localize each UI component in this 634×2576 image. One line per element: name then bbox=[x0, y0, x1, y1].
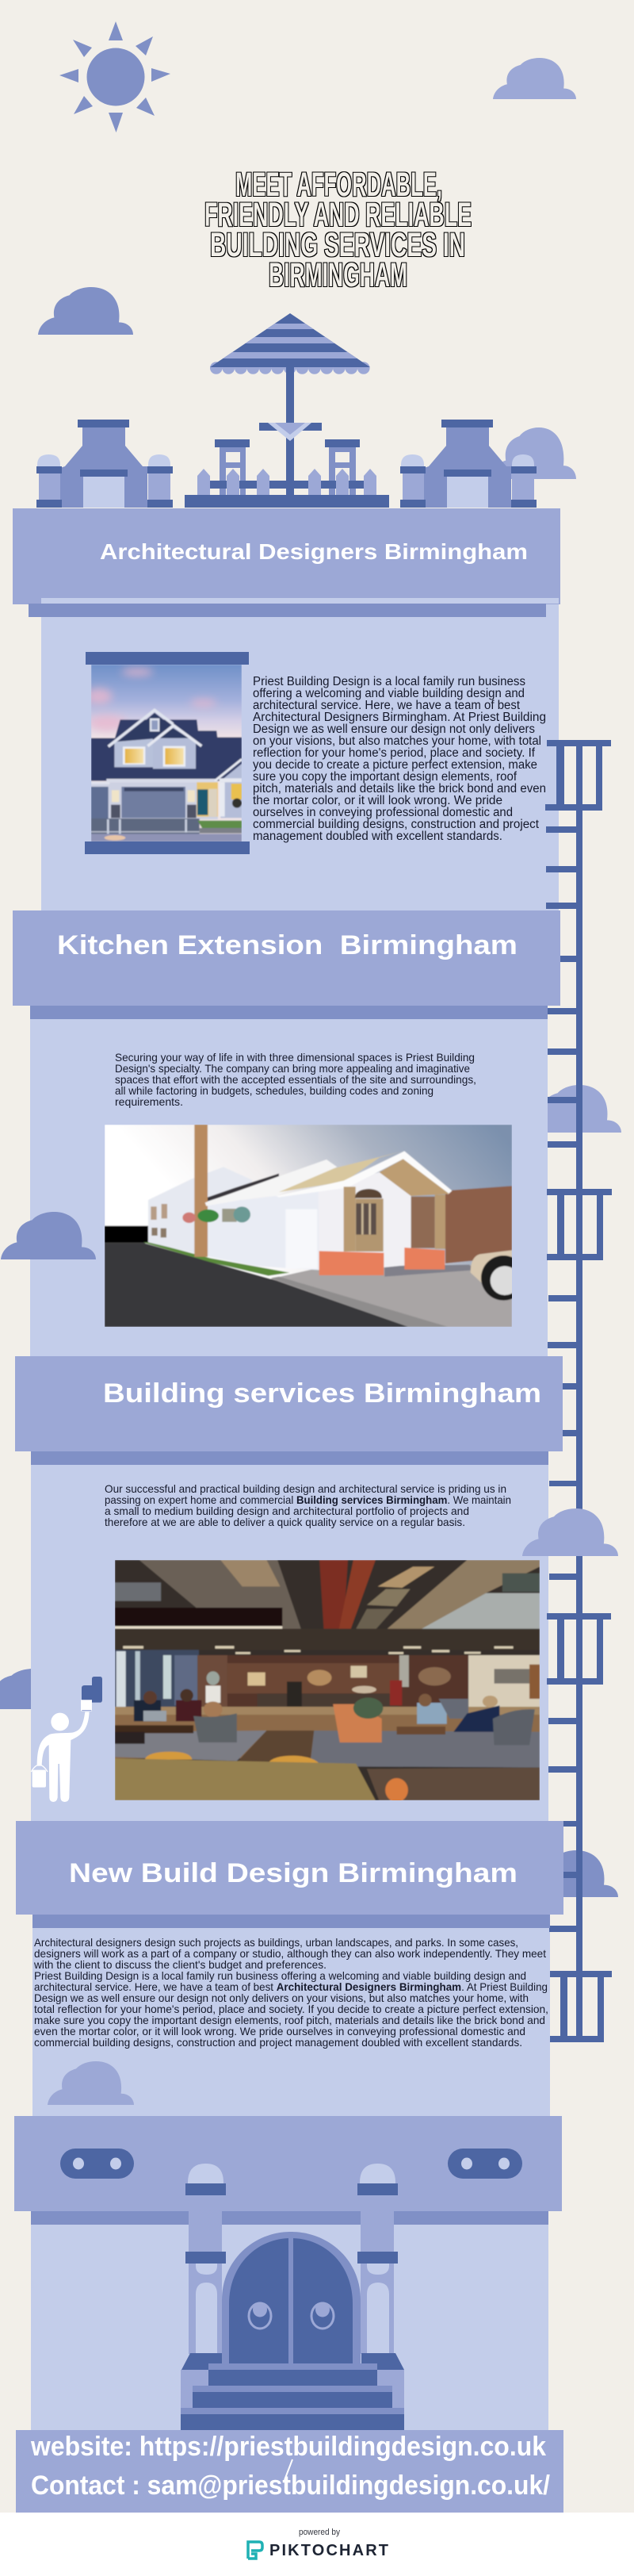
text: new build design description: Priest Building Design is a local family run business offering a welcoming and viable building design and bbox=[34, 1969, 526, 1982]
title bbox=[204, 166, 472, 294]
panel: section backgrounds bbox=[30, 598, 559, 2430]
panel: heading architectural designers bbox=[13, 508, 560, 617]
panel: heading kitchen extension: Kitchen Extension Birmingham bbox=[57, 930, 518, 960]
text: building services intro: passing on expert home and commercial Building services Birmingham. We maintain bbox=[105, 1493, 511, 1506]
icon: cloud left of extension render bbox=[1, 1212, 96, 1259]
text: architectural designers intro: reflection for your home's period, place and society. If bbox=[253, 746, 536, 760]
text: architectural designers intro: sure you copy the important design elements, roof bbox=[253, 770, 518, 784]
text: new build design description: Design we as well ensure our design not only delivers on your visions, but also matches your home, with bbox=[34, 1991, 529, 2004]
text: new build design description bbox=[33, 1936, 548, 2049]
text: building services intro: a small to medium building design and architectural portfolio of projects and bbox=[105, 1505, 469, 1517]
ladder bbox=[545, 740, 612, 2042]
text: new build design description: architectural service. Here, we have a team of best Architectural Designers Birmingham. At Priest Building bbox=[34, 1980, 548, 1993]
fence base bbox=[185, 495, 389, 508]
small right tower bbox=[325, 439, 360, 495]
text: kitchen extension intro: spaces that effort with the accepted essentials of the site and surroundings, bbox=[115, 1073, 476, 1086]
panel: heading new build design: New Build Design Birmingham bbox=[69, 1858, 518, 1888]
text: architectural designers intro: the mortar color, or it will look wrong. We pride bbox=[253, 794, 502, 807]
icon: cloud behind right house bbox=[491, 427, 576, 479]
icon: cloud over right edge bbox=[522, 1508, 618, 1556]
text: architectural designers intro: commercial building designs, construction and project bbox=[253, 818, 540, 831]
text: new build design description: commercial building designs, construction and project management doubled with excellent standards. bbox=[34, 2036, 522, 2049]
photo: office lounge interior bbox=[115, 1560, 540, 1802]
text: architectural designers intro: offering a welcoming and viable building design and bbox=[253, 687, 525, 700]
photo: extension render bbox=[105, 1125, 526, 1327]
panel: heading kitchen extension bbox=[13, 910, 560, 1019]
text: building services intro: therefore at we are able to deliver a quick quality service on a regular basis. bbox=[105, 1516, 465, 1528]
icon: entrance door and steps bbox=[181, 2164, 404, 2430]
panel: building facade top bbox=[14, 2116, 562, 2225]
text: new build design description: Architectural designers design such projects as buildings, urban landscapes, and parks. In some cases, bbox=[34, 1936, 518, 1949]
icon: cloud behind panel left bbox=[0, 1669, 75, 1709]
text: architectural designers intro: you decide to create a picture perfect extension, make bbox=[253, 758, 537, 772]
fence bbox=[197, 469, 376, 495]
text: architectural designers intro: architectural service. Here, we have a team of best bbox=[253, 699, 521, 712]
icon: cloud in new build panel bbox=[48, 2061, 134, 2105]
text: kitchen extension intro: requirements. bbox=[115, 1095, 183, 1108]
left house bbox=[36, 420, 173, 508]
text: architectural designers intro: Design we as well ensure our design not only delivers bbox=[253, 723, 535, 736]
text: architectural designers intro: Priest Building Design is a local family run business bbox=[253, 675, 525, 688]
panel: contact details: Contact : sam@priestbuildingdesign.co.uk/ bbox=[31, 2471, 551, 2501]
panel: contact details: website: https://priestbuildingdesign.co.uk bbox=[30, 2432, 546, 2462]
icon: umbrella bbox=[210, 313, 370, 374]
text: architectural designers intro: ourselves in conveying professional domestic and bbox=[253, 806, 513, 819]
footer strip bbox=[0, 2513, 634, 2576]
title: MEET AFFORDABLE, bbox=[235, 166, 442, 204]
panel: contact details bbox=[16, 2430, 563, 2513]
text: new build design description: make sure you copy the important design elements, roof pitch, materials and details like the brick bond and bbox=[34, 2014, 545, 2026]
photo: house at dusk bbox=[85, 652, 250, 854]
text: new build design description: total reflection for your home's period, place and society. If you decide to create a picture perfect extension, bbox=[34, 2003, 548, 2015]
panel: heading architectural designers: Architectural Designers Birmingham bbox=[100, 539, 528, 564]
umbrella pole bbox=[286, 367, 294, 495]
text: architectural designers intro: Architectural Designers Birmingham. At Priest Building bbox=[253, 711, 546, 724]
right house bbox=[400, 420, 537, 508]
text: architectural designers intro bbox=[253, 675, 546, 843]
text: building services intro: Our successful and practical building design and architectural service is priding us in bbox=[105, 1482, 506, 1495]
panel: heading new build design bbox=[16, 1821, 563, 1928]
text: kitchen extension intro: Securing your way of life in with three dimensional spaces is Priest Building bbox=[115, 1051, 475, 1064]
umbrella stand bracket bbox=[259, 423, 322, 441]
text: architectural designers intro: on your visions, but also matches your home, with total bbox=[253, 734, 541, 748]
panel: heading building services: Building services Birmingham bbox=[103, 1378, 541, 1409]
text: kitchen extension intro: Design's specialty. The company can bring more appealing and imaginative bbox=[115, 1062, 470, 1075]
title: BIRMINGHAM bbox=[269, 256, 407, 294]
small left tower bbox=[215, 439, 250, 495]
icon: cloud top left bbox=[38, 287, 133, 335]
title: BUILDING SERVICES IN bbox=[210, 226, 465, 264]
logo: piktochart: PIKTOCHART bbox=[269, 2542, 388, 2559]
title: FRIENDLY AND RELIABLE bbox=[204, 196, 472, 234]
text: powered by: powered by bbox=[299, 2528, 340, 2537]
icon: sun bbox=[59, 21, 170, 132]
text: kitchen extension intro bbox=[115, 1051, 476, 1108]
text: architectural designers intro: pitch, materials and details like the brick bond and even bbox=[253, 782, 546, 795]
icon: painter figure bbox=[31, 1677, 102, 1802]
text: new build design description: even the mortar color, or it will look wrong. We pride ourselves in conveying professional domestic and bbox=[34, 2025, 525, 2037]
text: kitchen extension intro: all while factoring in budgets, schedules, building codes and zoning bbox=[115, 1084, 433, 1097]
text: building services intro bbox=[105, 1482, 511, 1528]
icon: cloud top right bbox=[493, 58, 576, 99]
text: architectural designers intro: management doubled with excellent standards. bbox=[253, 830, 502, 843]
icon: cloud behind fourth heading bbox=[523, 1850, 618, 1897]
panel: heading building services bbox=[15, 1356, 563, 1465]
text: new build design description: designers will work as a part of a company or studio, although they can also work independently. They meet bbox=[34, 1947, 546, 1960]
icon: cloud behind ladder bbox=[526, 1085, 621, 1133]
text: new build design description: with the client to discuss the client's budget and preferences. bbox=[33, 1958, 327, 1971]
